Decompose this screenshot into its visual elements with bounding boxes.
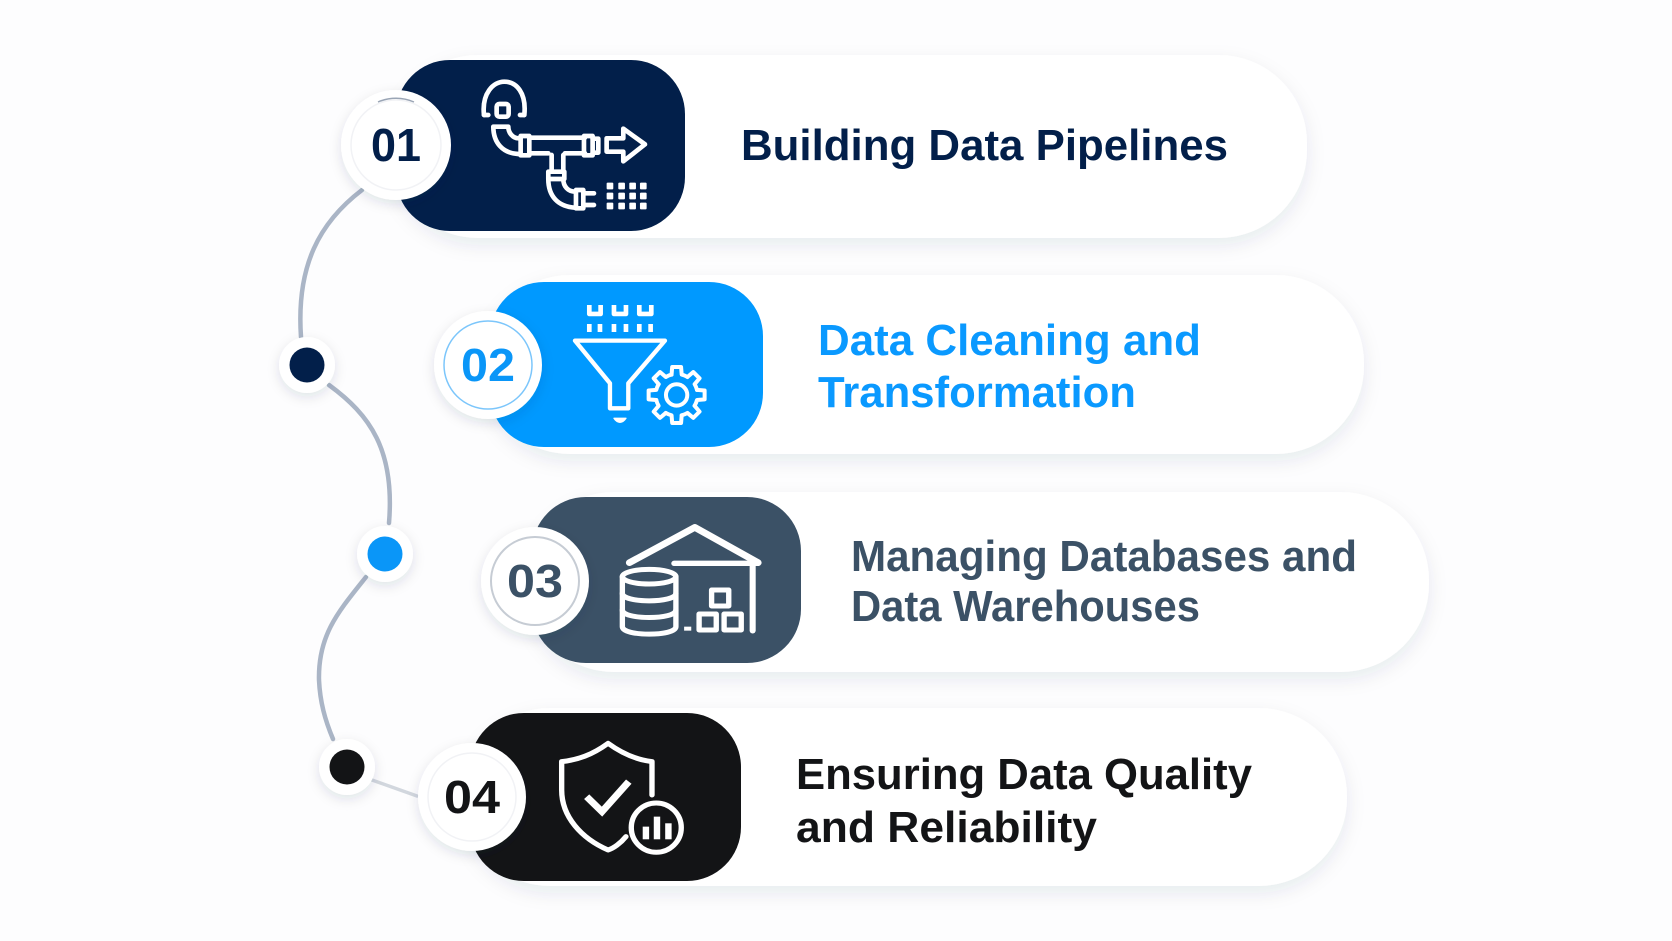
card background 3 bbox=[526, 492, 1429, 672]
heading: building data pipelines: Building Data Pipelines bbox=[741, 121, 1228, 170]
number badge 02 bbox=[434, 311, 542, 419]
number badge 04: 04 bbox=[444, 771, 500, 823]
panel: step 3 managing databases bbox=[481, 492, 1429, 672]
heading: managing databases and data warehouses: Data Warehouses bbox=[851, 582, 1200, 631]
panel: step 4 ensuring data quality bbox=[418, 708, 1347, 886]
panel: step 1 building data pipelines bbox=[341, 55, 1307, 238]
timeline node 3 bbox=[319, 739, 375, 795]
number badge 01 bbox=[341, 90, 451, 200]
heading: ensuring data quality and reliability: and Reliability bbox=[796, 803, 1098, 852]
card background 1 bbox=[390, 55, 1307, 238]
timeline node 2 bbox=[357, 526, 413, 582]
heading: data cleaning and transformation: Data Cleaning and bbox=[818, 316, 1201, 365]
icon tile 1 bbox=[396, 60, 685, 231]
timeline node 1 bbox=[279, 337, 335, 393]
icon tile 3 bbox=[532, 497, 801, 663]
panel: step 2 data cleaning bbox=[434, 275, 1364, 454]
card background 2 bbox=[482, 275, 1364, 454]
icon: warehouse and database bbox=[622, 527, 758, 634]
heading: ensuring data quality and reliability: Ensuring Data Quality bbox=[796, 750, 1253, 799]
number badge 03: 03 bbox=[507, 555, 563, 607]
heading: managing databases and data warehouses: Managing Databases and bbox=[851, 532, 1357, 581]
number badge 01: 01 bbox=[371, 119, 421, 171]
connector path bbox=[300, 190, 417, 796]
icon tile 4 bbox=[470, 713, 741, 881]
number badge 02: 02 bbox=[461, 339, 515, 391]
icon tile 2 bbox=[490, 282, 763, 447]
card background 4 bbox=[462, 708, 1347, 886]
number badge 04 bbox=[418, 743, 526, 851]
icon: shield with check and chart bbox=[562, 743, 681, 852]
icon: pipeline bbox=[484, 82, 647, 209]
icon: funnel and gear bbox=[575, 305, 705, 423]
heading: data cleaning and transformation: Transformation bbox=[818, 368, 1136, 417]
number badge 03 bbox=[481, 527, 589, 635]
